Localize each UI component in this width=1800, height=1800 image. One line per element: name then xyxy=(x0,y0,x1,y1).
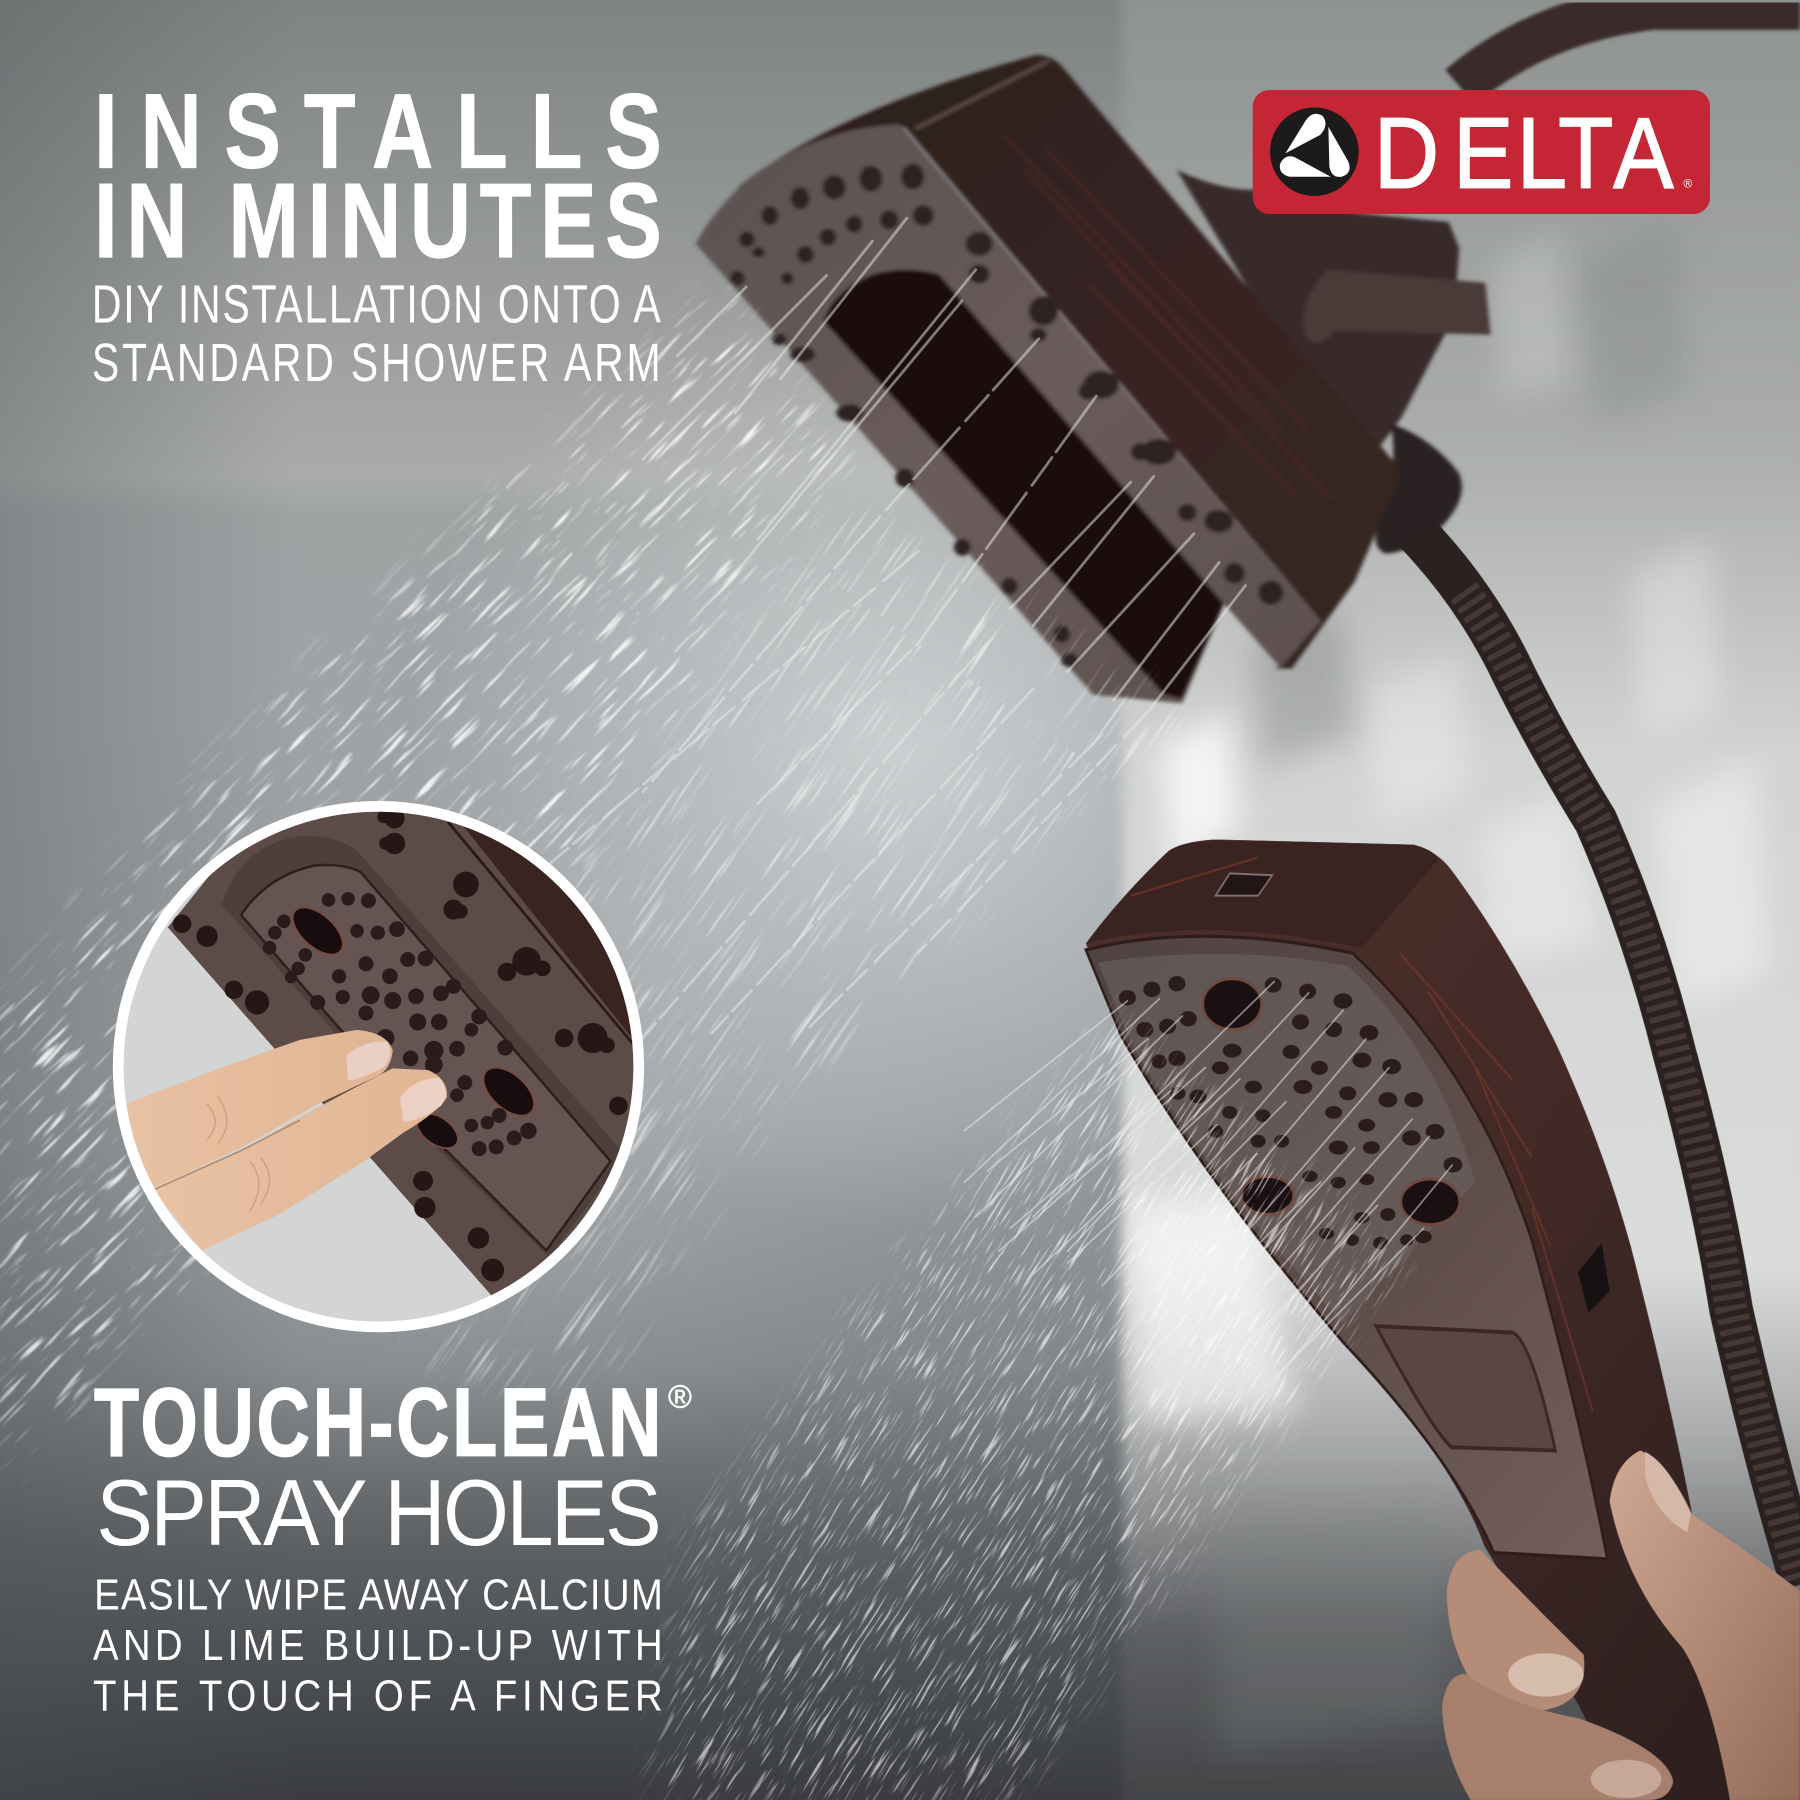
side slot xyxy=(1578,1243,1610,1313)
diverter lever xyxy=(1303,270,1491,342)
head body xyxy=(737,55,1400,669)
nozzle holes xyxy=(730,164,1283,667)
hand shower top surface xyxy=(1086,840,1437,948)
flexible hose xyxy=(1406,522,1800,1584)
heading: touch-clean spray holes: SPRAY HOLES xyxy=(96,1460,662,1565)
text: DIY installation: DIY INSTALLATION ONTO A xyxy=(92,275,661,335)
text: easily wipe away xyxy=(93,1570,663,1720)
water spray: top head centre xyxy=(425,510,1176,1407)
water spray: hand shower xyxy=(638,1000,1418,1800)
inset small holes xyxy=(263,892,537,1156)
text: easily wipe away: EASILY WIPE AWAY CALCIUM xyxy=(94,1570,663,1619)
heading: installs in minutes: IN MINUTES xyxy=(94,162,662,280)
head brushed finish xyxy=(1004,135,1334,500)
head face plate xyxy=(696,124,1321,703)
inset circle: finger wiping spray holes xyxy=(118,790,660,1350)
heading: touch-clean spray holes xyxy=(94,1369,692,1565)
hand shower brushed finish xyxy=(1131,857,1593,1412)
inset upper finger xyxy=(121,1030,393,1190)
logo: Delta xyxy=(1253,90,1710,214)
text: easily wipe away: THE TOUCH OF A FINGER xyxy=(93,1671,663,1720)
head neck and mount xyxy=(1177,170,1459,474)
heading: touch-clean spray holes: TOUCH-CLEAN xyxy=(94,1369,661,1477)
text: DIY installation: STANDARD SHOWER ARM xyxy=(92,334,661,394)
inset raised spray panel xyxy=(221,836,625,1258)
heading: installs in minutes xyxy=(94,73,662,280)
heading: touch-clean spray holes: ® xyxy=(668,1378,692,1414)
gripping hand xyxy=(1442,1450,1800,1800)
mode button xyxy=(1376,1326,1555,1450)
hand shower body xyxy=(1086,840,1730,1800)
water jets from top head xyxy=(540,218,1246,1091)
logo: Delta: ® xyxy=(1683,176,1692,190)
wordmark: DELTA xyxy=(1374,98,1674,209)
hand shower top slot xyxy=(1216,873,1272,896)
text: DIY installation xyxy=(92,275,661,394)
dark hollow xyxy=(824,270,1224,699)
fixed shower head xyxy=(696,55,1491,703)
inset border nozzle holes xyxy=(173,808,628,1282)
hand shower xyxy=(1086,840,1800,1800)
swivel connector xyxy=(1376,424,1462,554)
text: easily wipe away: AND LIME BUILD-UP WITH xyxy=(93,1621,663,1670)
heading: installs in minutes: INSTALLS xyxy=(94,73,662,191)
spray nozzles xyxy=(1119,976,1462,1250)
inset spray plate xyxy=(168,812,634,1296)
shower arm xyxy=(1460,7,1800,87)
water jets from hand shower xyxy=(964,982,1452,1423)
inset dark body strip xyxy=(464,826,632,1038)
hand shower face plate xyxy=(1086,936,1607,1559)
inset lower finger xyxy=(154,1068,447,1250)
icon: Delta triangle mark xyxy=(1270,107,1359,196)
water spray: top head left xyxy=(0,280,854,1466)
inset large holes xyxy=(284,899,543,1155)
